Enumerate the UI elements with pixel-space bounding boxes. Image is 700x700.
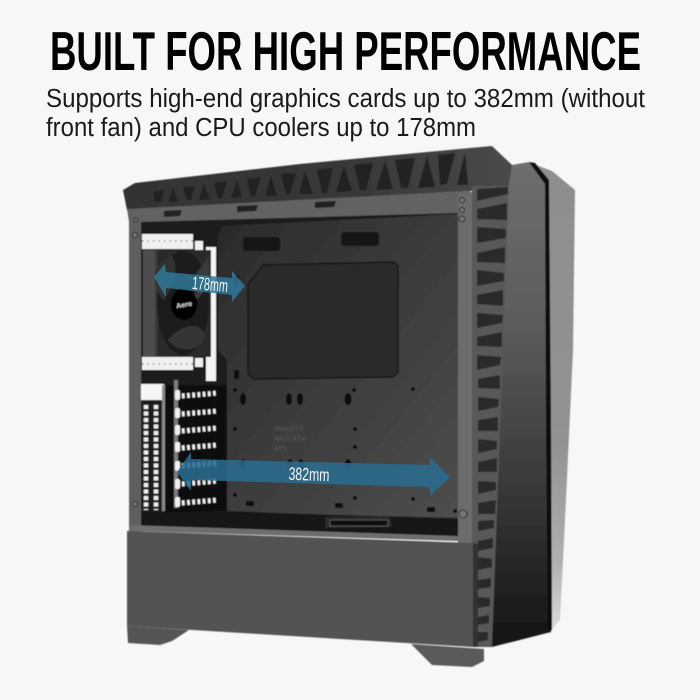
psu shroud — [127, 531, 473, 647]
screws — [132, 198, 467, 518]
motherboard size labels — [274, 426, 306, 453]
gray frame band — [127, 191, 472, 228]
honeycomb gaps — [142, 241, 193, 364]
motherboard size labels: Micro ATX — [274, 436, 306, 443]
vent column frame — [472, 186, 509, 647]
fan: Aero — [176, 301, 193, 310]
top shell — [123, 146, 512, 210]
left frame — [129, 214, 141, 532]
left foot — [127, 626, 189, 645]
rear bracket perforations — [146, 405, 156, 510]
subtitle: Supports high-end graphics cards up to 382mm (without — [46, 85, 645, 113]
subtitle — [46, 85, 645, 142]
arrow: 178mm cooler clearance — [154, 264, 245, 302]
right side panel strip — [528, 162, 575, 632]
black divider line — [529, 162, 552, 631]
drive tray — [325, 516, 392, 528]
right foot — [411, 644, 484, 667]
label: 382mm: 382mm — [288, 464, 330, 485]
rear frame bar — [162, 385, 165, 511]
fan hub — [171, 288, 197, 320]
subtitle: front fan) and CPU coolers up to 178mm — [46, 114, 476, 142]
expansion slots — [165, 380, 227, 513]
top vents — [153, 152, 468, 202]
computer case illustration — [123, 146, 575, 667]
label: 178mm: 178mm — [191, 273, 229, 296]
top band latches — [164, 201, 336, 217]
front vents — [477, 187, 508, 642]
motherboard size labels: ATX — [274, 446, 287, 453]
white rear openings — [141, 247, 216, 400]
fan frame — [143, 250, 211, 357]
arrow: 382mm graphics card clearance — [177, 452, 450, 496]
case floor — [141, 511, 458, 538]
slot clips — [175, 390, 180, 507]
fan blades — [168, 326, 205, 349]
cable slots — [243, 232, 379, 251]
perforated honeycomb strips — [142, 234, 203, 370]
slot hatches — [182, 393, 218, 503]
right frame — [458, 192, 472, 546]
shroud right edge — [473, 543, 478, 647]
interior dark base — [141, 213, 458, 525]
back panel — [218, 214, 458, 518]
keyhole mounts — [233, 276, 457, 513]
floor edge — [129, 525, 458, 541]
motherboard size labels: Mini-DTX — [274, 426, 303, 433]
front side panel — [478, 147, 551, 647]
fan — [143, 250, 211, 357]
motherboard tray cutout — [248, 262, 398, 379]
